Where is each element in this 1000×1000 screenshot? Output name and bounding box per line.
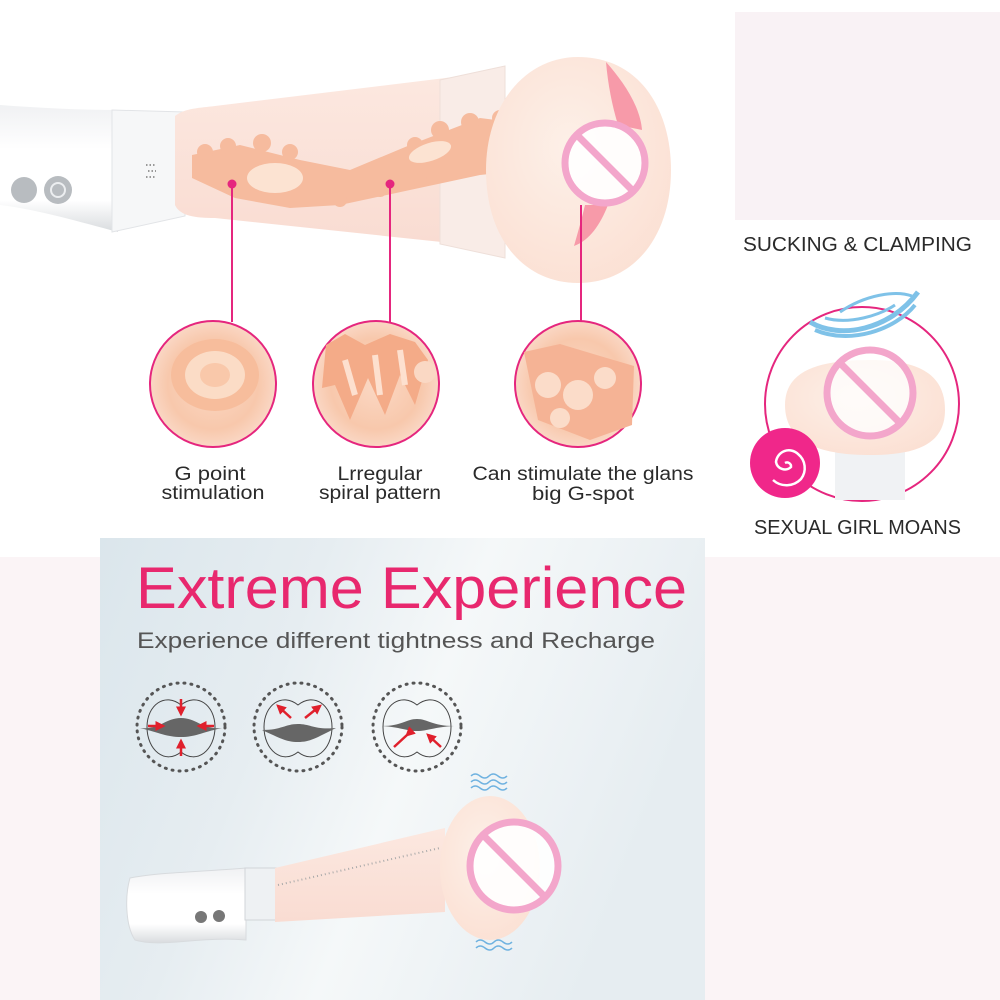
caption: G point stimulation: stimulation <box>162 483 264 504</box>
buttons <box>195 911 207 923</box>
device handle <box>0 105 118 232</box>
panel: extreme experience <box>100 538 705 1000</box>
callout: spiral leader <box>386 180 394 322</box>
chamber vent dots <box>146 165 156 177</box>
label: sucking and clamping: SUCKING & CLAMPING <box>743 234 972 256</box>
tube collar <box>440 66 505 258</box>
diagram: squeeze inward <box>137 683 225 771</box>
caption: G point stimulation: G point <box>174 464 246 485</box>
detail circle: G-spot <box>515 321 641 447</box>
caption: irregular spiral pattern: Lrregular <box>338 464 423 485</box>
label: sexual girl moans: SEXUAL GIRL MOANS <box>754 517 961 539</box>
detail circle: G point <box>150 321 276 447</box>
feature circle: moans <box>750 292 959 501</box>
censor mark <box>470 822 558 910</box>
small device <box>127 774 558 950</box>
upper right pink panel <box>735 12 1000 220</box>
clear chamber <box>112 110 185 232</box>
heading: Extreme Experience <box>136 556 687 621</box>
diagram: release downward <box>373 683 461 771</box>
subheading: Experience different tightness and Recharge <box>137 628 655 653</box>
cap <box>440 796 540 940</box>
sleeve <box>275 828 445 922</box>
spiral badge <box>750 428 820 498</box>
cap folds <box>606 62 642 130</box>
detail circle: spiral pattern <box>313 321 439 447</box>
censor mark <box>565 123 645 203</box>
censor mark <box>827 350 913 436</box>
inner canal texture <box>192 110 575 208</box>
product: main device <box>0 57 671 283</box>
soft cap <box>785 360 945 455</box>
caption: glans big G-spot: big G-spot <box>532 484 635 505</box>
buttons <box>11 176 72 204</box>
device base <box>835 445 905 500</box>
caption: irregular spiral pattern: spiral pattern <box>319 483 441 504</box>
vibration waves <box>471 774 507 790</box>
clear tube <box>175 75 470 245</box>
handle <box>127 868 246 943</box>
caption: glans big G-spot: Can stimulate the glans <box>472 464 694 485</box>
canal highlights <box>247 137 454 193</box>
callout: G point leader <box>228 180 236 322</box>
diagram: release upward <box>254 683 342 771</box>
chamber <box>245 868 277 920</box>
end cap <box>486 57 671 283</box>
callout: glans leader <box>580 205 582 322</box>
scale line <box>278 848 440 885</box>
vibration waves <box>476 940 512 950</box>
lower pink background <box>0 557 1000 1000</box>
water splash <box>810 292 918 336</box>
